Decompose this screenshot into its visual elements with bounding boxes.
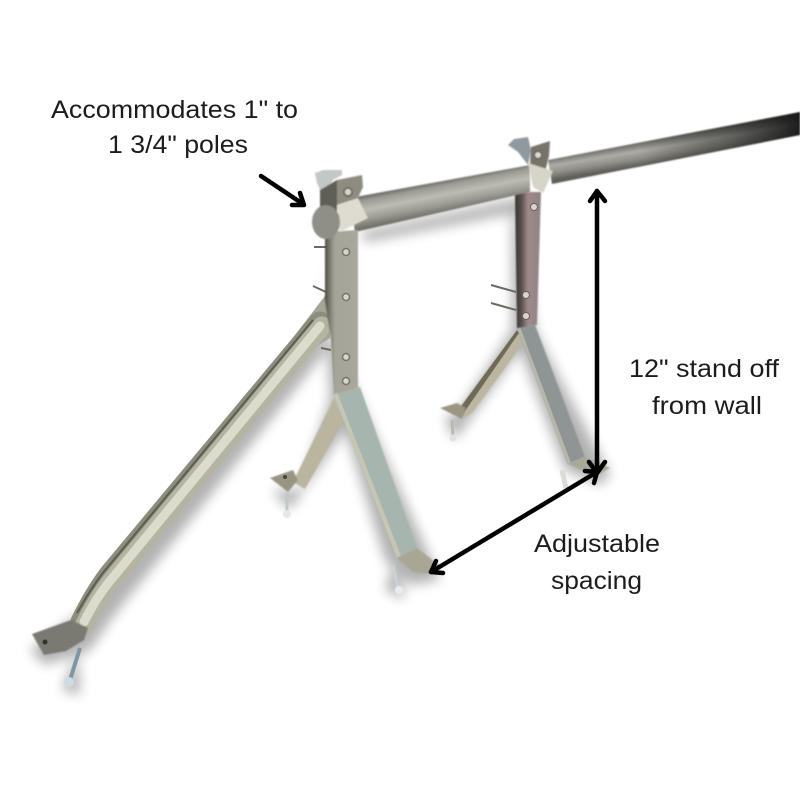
front foot — [397, 548, 440, 574]
front upright strap — [325, 230, 358, 394]
front main leg — [333, 387, 417, 558]
rear secondary bolt — [450, 420, 456, 442]
rear secondary foot — [440, 403, 466, 419]
label: accommodates poles: 1 3/4" poles — [108, 131, 248, 159]
tube foot plate — [32, 620, 88, 655]
tube foot bolt — [64, 648, 80, 687]
diagonal support tube — [77, 288, 331, 624]
rear foot bolt — [562, 470, 566, 488]
label: stand off: from wall — [652, 392, 762, 420]
front secondary bolt — [283, 493, 291, 518]
tube body — [77, 320, 322, 624]
front strap rivets — [342, 248, 350, 384]
front secondary foot — [270, 470, 298, 492]
rear secondary leg — [459, 330, 524, 418]
pole — [350, 112, 800, 232]
front bracket — [270, 230, 440, 594]
label: adjustable spacing: Adjustable — [534, 530, 660, 558]
label: adjustable spacing: spacing — [551, 567, 642, 595]
rear foot — [568, 457, 610, 474]
arrow: poles callout — [261, 176, 304, 205]
pole end cap — [312, 205, 340, 239]
front foot bolt — [393, 565, 403, 594]
label: accommodates poles — [51, 96, 298, 159]
label: stand off — [629, 355, 779, 420]
drop shadows — [30, 196, 610, 695]
label: accommodates poles: Accommodates 1" to — [51, 96, 298, 124]
label: adjustable spacing — [534, 530, 660, 595]
front secondary leg — [293, 398, 343, 489]
tube brace plate — [282, 288, 331, 362]
front clamp and pole end — [312, 170, 368, 239]
label: stand off: 12" stand off — [629, 355, 779, 383]
pins: rear — [491, 285, 516, 310]
arrow: adjustable spacing — [431, 471, 597, 573]
rear upright strap — [515, 192, 541, 328]
pins: front — [313, 247, 331, 350]
tube foot hole — [42, 640, 48, 644]
rear strap rivets — [522, 204, 538, 320]
rear clamp — [508, 137, 553, 193]
rear bracket — [440, 192, 610, 488]
arrow: stand off height — [589, 191, 605, 473]
rear main leg — [517, 325, 585, 464]
